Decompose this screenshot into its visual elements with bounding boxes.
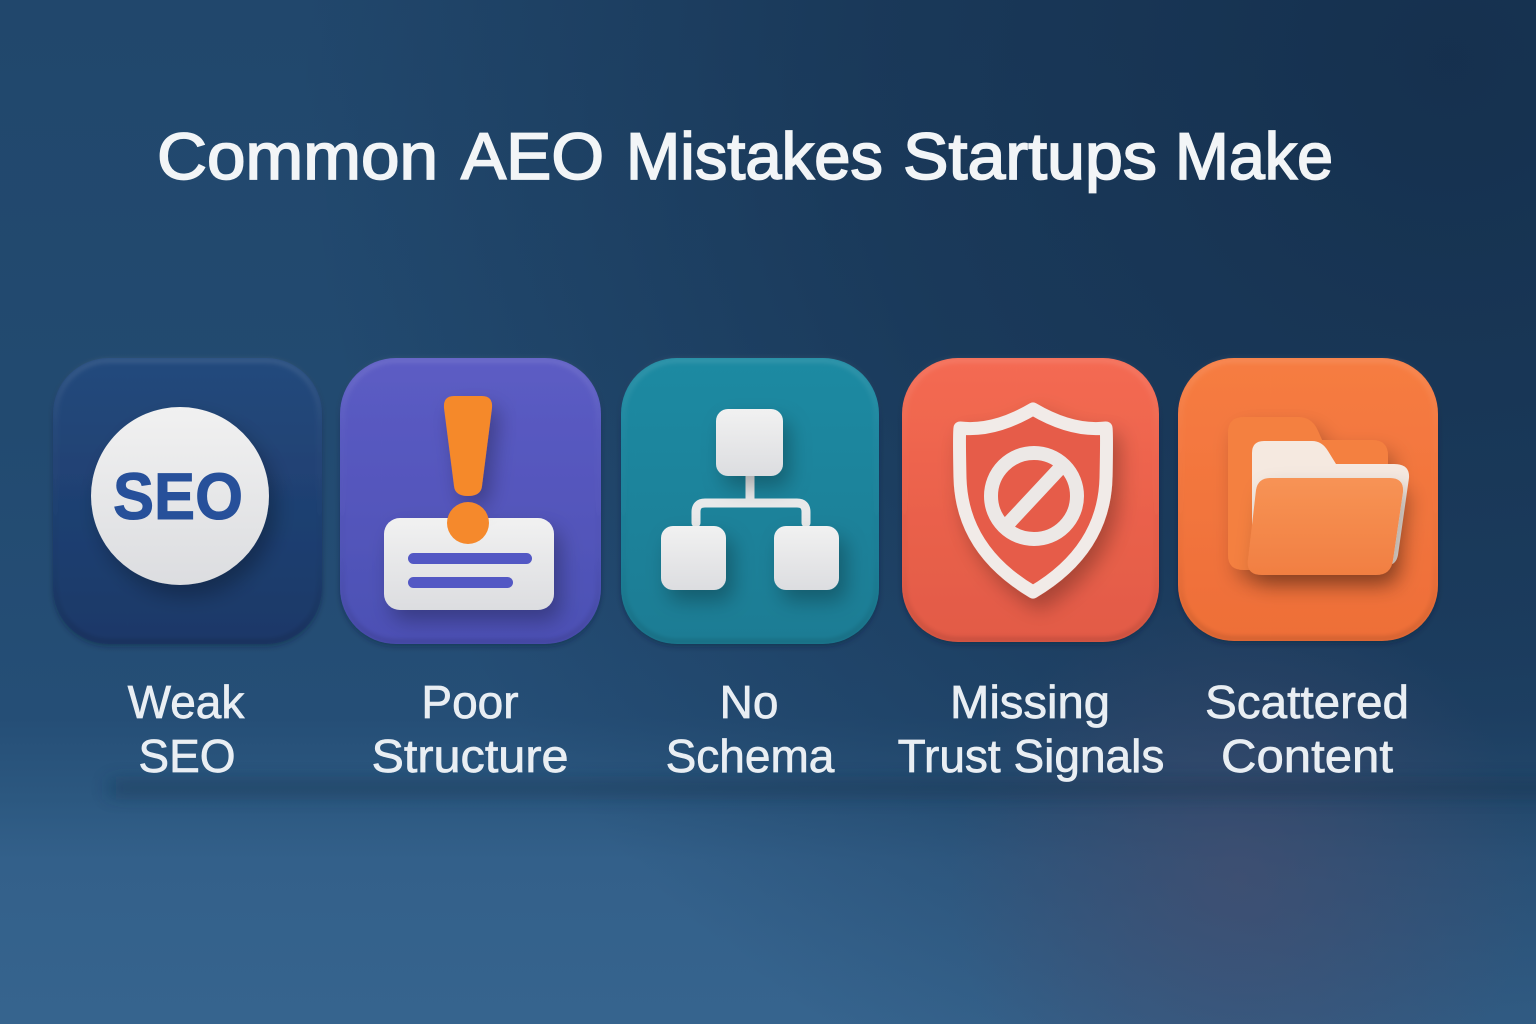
title: Make: [1175, 119, 1333, 193]
icon: warning card with exclamation mark: [384, 396, 554, 610]
icon: folder: [1228, 417, 1409, 575]
icon tile: teal: [621, 358, 879, 644]
label: No Schema: No: [720, 676, 778, 728]
label: No Schema: Schema: [666, 730, 835, 782]
icon: shield with prohibited sign: [960, 409, 1106, 592]
panel: Weak SEO: [53, 358, 322, 782]
icon tile: coral: [902, 358, 1159, 642]
label: Poor Structure: Structure: [372, 730, 568, 782]
label: Missing Trust Signals: Trust Signals: [898, 730, 1164, 782]
icon tile: navy: [53, 358, 322, 644]
panel: Scattered Content: [1178, 358, 1438, 782]
title: Common: [157, 119, 438, 193]
icon tile: orange: [1178, 358, 1438, 641]
title: AEO: [461, 119, 604, 193]
label: Scattered Content: Content: [1221, 730, 1393, 782]
label: Weak SEO: Weak: [128, 676, 245, 728]
label: Weak SEO: SEO: [138, 730, 236, 782]
label: Poor Structure: Poor: [421, 676, 519, 728]
icon tile: purple: [340, 358, 601, 644]
panel: Missing Trust Signals: [898, 358, 1164, 782]
icon: hierarchy diagram: [661, 409, 839, 590]
icon: SEO badge: [91, 407, 269, 585]
title: Mistakes: [626, 119, 883, 193]
title: Startups: [903, 119, 1157, 193]
label: Missing Trust Signals: Missing: [950, 676, 1110, 728]
icon: SEO badge: SEO: [113, 459, 243, 533]
panel: No Schema: [621, 358, 879, 782]
panel: Poor Structure: [340, 358, 601, 782]
label: Scattered Content: Scattered: [1205, 676, 1409, 728]
